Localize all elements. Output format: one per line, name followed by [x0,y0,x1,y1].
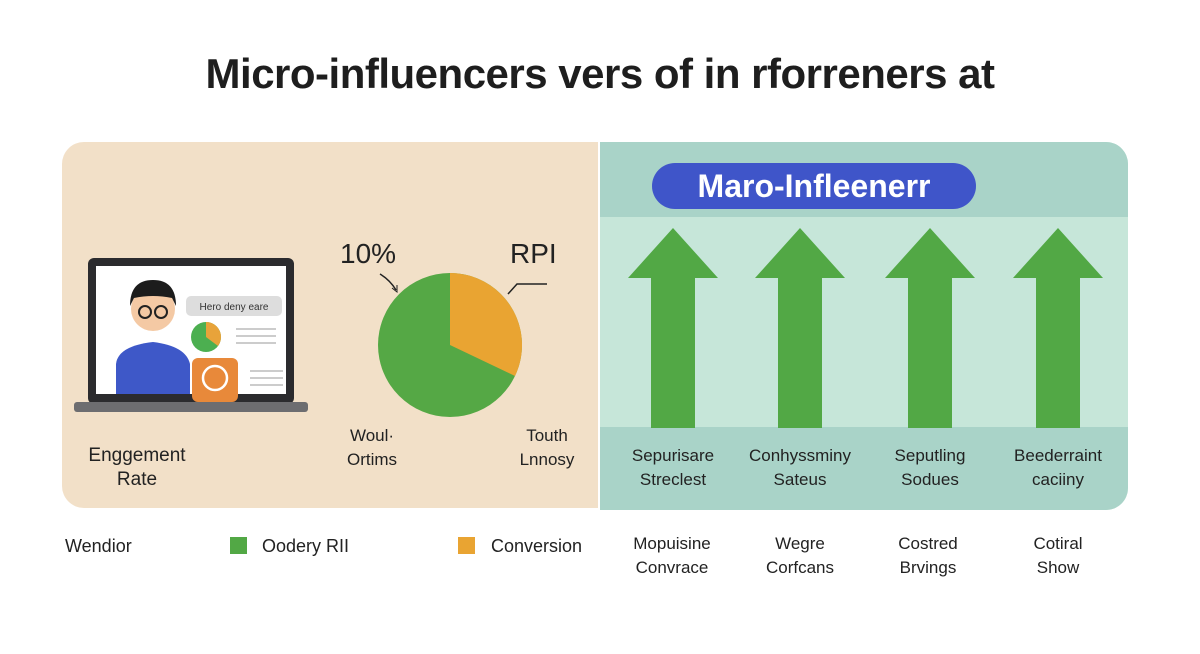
bottom labels right: Convrace [636,558,708,577]
text: Brvings [900,558,956,577]
panel: right macro: caciiny [1032,470,1084,489]
arrows [628,228,1103,428]
panel: right macro: Sateus [774,470,826,489]
icon: laptop [74,258,308,412]
text: Conversion [491,536,582,556]
legend: Wendior [65,536,132,556]
panel: left micro [62,142,598,508]
chart: pie [378,273,547,417]
label: touth lnnosy: Touth [526,426,568,445]
text: Show [1037,558,1079,577]
text: Corfcans [766,558,834,577]
arrow labels [632,446,714,489]
bottom labels right [633,534,711,577]
icon: laptop: Hero deny eare [200,302,269,313]
label: woul ortims: Ortims [347,450,397,469]
label: touth lnnosy [520,426,574,469]
label: RPI: RPI [510,238,557,269]
text: Oodery RII [262,536,349,556]
panel: right macro: Beederraint [1014,446,1102,465]
heading pill [652,163,976,209]
panel: right macro: Sodues [901,470,959,489]
label: engagement rate: Rate [117,469,157,490]
panel: right macro: Seputling [895,446,965,465]
arrow labels: Sepurisare [632,446,714,465]
label: touth lnnosy: Lnnosy [520,450,574,469]
arrow labels: Streclest [640,470,706,489]
text: Wegre [775,534,825,553]
label: engagement rate [88,445,186,490]
title: Micro-influencers vers of in rforreners at [206,50,994,97]
label: woul ortims: Woul· [350,426,394,445]
heading pill: Maro-Infleenerr [698,168,930,204]
text: Cotiral [1033,534,1083,553]
label: engagement rate: Enggement [88,445,186,466]
label: 10%: 10% [340,238,396,269]
panel: right macro: Conhyssminy [749,446,851,465]
bottom labels right: Mopuisine [633,534,711,553]
label: woul ortims [347,426,397,469]
text: Costred [898,534,958,553]
panel: right macro [600,142,1128,510]
